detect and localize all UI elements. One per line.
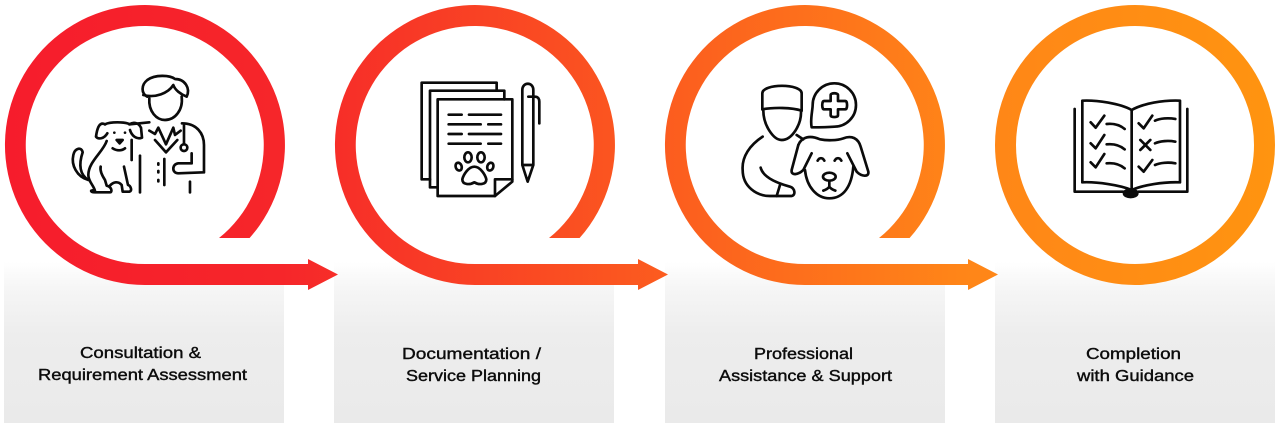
text: step 3 label bbox=[719, 346, 893, 385]
arrow ring: step 3 bbox=[665, 5, 998, 290]
icon: doctor with dog and medical bubble bbox=[743, 83, 868, 198]
text: step 4 label bbox=[1076, 346, 1194, 385]
icon: documents with paw and pen bbox=[422, 83, 539, 196]
icon: veterinarian with dog bbox=[73, 76, 204, 192]
arrow ring: step 1 bbox=[5, 5, 338, 290]
panel: step 4 label background bbox=[995, 262, 1275, 423]
panel: step 3 label background bbox=[665, 262, 945, 423]
ring: step 4 bbox=[1006, 16, 1264, 274]
panel: step 1 label background bbox=[4, 262, 284, 423]
panel: step 2 label background bbox=[334, 262, 614, 423]
arrow ring: step 2 bbox=[335, 5, 668, 290]
text: step 4 label: Completion bbox=[1086, 346, 1181, 363]
text: step 1 label bbox=[38, 345, 248, 384]
text: step 1 label: Consultation & bbox=[80, 345, 201, 362]
text: step 3 label: Professional bbox=[754, 346, 853, 363]
text: step 1 label: Requirement Assessment bbox=[38, 367, 248, 384]
text: step 2 label: Documentation / bbox=[402, 346, 542, 363]
icon: open book with checklist bbox=[1075, 101, 1187, 197]
text: step 3 label: Assistance & Support bbox=[719, 368, 893, 385]
text: step 2 label bbox=[402, 346, 542, 385]
text: step 4 label: with Guidance bbox=[1076, 368, 1194, 385]
text: step 2 label: Service Planning bbox=[406, 368, 541, 385]
